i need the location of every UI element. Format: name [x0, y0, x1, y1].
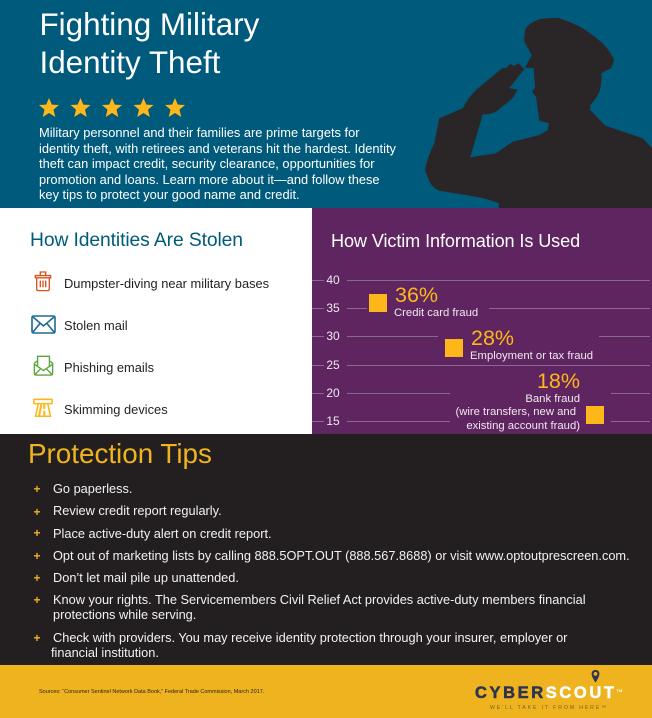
icon: map pin: [592, 670, 600, 682]
intro text: key tips to protect your good name and credit.: [39, 187, 300, 202]
chart: fraud types on percentage scale: 35: [326, 301, 340, 315]
logo: cyberscout: [475, 670, 622, 711]
chart: fraud types on percentage scale: 20: [326, 386, 340, 400]
panel: how identities are stolen: [0, 208, 312, 434]
panel: how victim information is used: [312, 208, 652, 434]
intro text: theft can impact credit, security clearance, opportunities for: [39, 156, 375, 171]
wordmark: CYBERSCOUTTM: [475, 684, 622, 702]
chart: fraud types on percentage scale: 25: [326, 358, 340, 372]
icon: five stars: [39, 98, 185, 117]
heading: How Identities Are Stolen: [30, 230, 243, 250]
tips list: Review credit report regularly.: [53, 503, 222, 518]
icon: saluting soldier silhouette: [425, 18, 652, 208]
text: skimming devices: Skimming devices: [64, 402, 168, 417]
tips list: +: [34, 505, 41, 519]
panel: header: [0, 0, 652, 208]
tips list: Opt out of marketing lists by calling 888.5OPT.OUT (888.567.8688) or visit www.optoutprescreen.com.: [53, 548, 630, 563]
data point: 28% employment or tax fraud: Employment or tax fraud: [470, 350, 593, 362]
tips list: +: [34, 482, 41, 496]
text: dumpster-diving: Dumpster-diving near military bases: [64, 276, 269, 291]
tips list: +: [34, 526, 41, 540]
chart: fraud types on percentage scale: [312, 273, 650, 432]
tips list: Check with providers. You may receive identity protection through your insurer, employer or: [53, 630, 567, 645]
text: phishing emails: Phishing emails: [64, 360, 154, 375]
tips list: Go paperless.: [53, 481, 132, 496]
data point: 36% credit card fraud: [369, 283, 478, 319]
title: Identity Theft: [40, 45, 220, 80]
data point: 36% credit card fraud: 36%: [395, 283, 438, 307]
tips list: +: [34, 593, 41, 607]
icon: open envelope: [34, 356, 54, 376]
data point: 28% employment or tax fraud: [445, 326, 593, 362]
tips list: Place active-duty alert on credit report.: [53, 526, 272, 541]
intro text: Military personnel and their families are prime targets for: [39, 125, 360, 140]
tips list: Know your rights. The Servicemembers Civil Relief Act provides active-duty members financial: [53, 592, 586, 607]
tips list: financial institution.: [51, 645, 159, 660]
icon: trash can: [34, 271, 52, 292]
data point: 18% bank fraud: 18%: [537, 369, 580, 393]
title: [40, 7, 260, 80]
tips list: +: [34, 631, 41, 645]
sources text: Sources: “Consumer Sentinel Network Data Book,” Federal Trade Commission, March 2017.: [39, 689, 264, 695]
tips list: +: [34, 549, 41, 563]
chart: fraud types on percentage scale: 15: [326, 414, 340, 428]
heading: Protection Tips: [28, 438, 212, 469]
data point: 18% bank fraud: (wire transfers, new and: [455, 406, 576, 418]
text: stolen mail: Stolen mail: [64, 318, 128, 333]
intro text: identity theft, with retirees and veterans hit the hardest. Identity: [39, 140, 396, 156]
data point: 18% bank fraud: Bank fraud: [525, 393, 580, 405]
intro text: promotion and loans. Learn more about it—and follow these: [39, 172, 380, 186]
panel: footer: [0, 665, 652, 718]
chart: fraud types on percentage scale: 40: [326, 273, 340, 287]
icon: card skimmer: [33, 398, 53, 417]
data point: 18% bank fraud: [455, 369, 604, 432]
data point: 36% credit card fraud: Credit card fraud: [394, 307, 478, 319]
data point: 28% employment or tax fraud: 28%: [471, 326, 514, 350]
heading: How Victim Information Is Used: [331, 231, 580, 251]
panel: protection tips: [0, 434, 652, 665]
intro text: [39, 125, 396, 202]
tips list: [34, 481, 630, 660]
chart: fraud types on percentage scale: 30: [326, 329, 340, 343]
tips list: protections while serving.: [53, 607, 196, 622]
icon: envelope: [31, 315, 56, 334]
data point: 18% bank fraud: existing account fraud): [466, 420, 580, 432]
tips list: +: [34, 571, 41, 585]
tips list: Don’t let mail pile up unattended.: [53, 570, 239, 585]
tagline: WE’LL TAKE IT FROM HERE™: [490, 705, 608, 711]
title: Fighting Military: [40, 7, 259, 42]
